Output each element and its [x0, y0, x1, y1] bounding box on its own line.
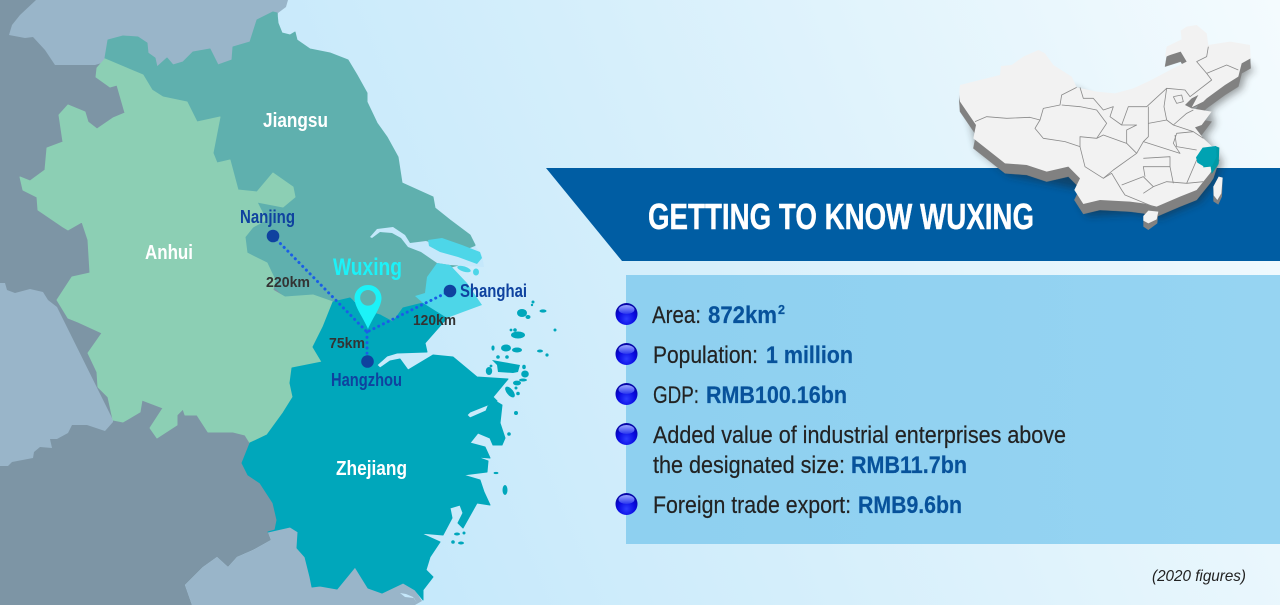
neighbouring region: north [9, 0, 288, 80]
locator map of China [959, 25, 1255, 230]
highlighted province: Zhejiang side wall [1203, 146, 1219, 174]
fact: added value: the designated size: [653, 452, 845, 479]
Shanghai [415, 263, 482, 318]
map extrusion [959, 35, 1251, 217]
fact: area: 2 [778, 302, 785, 317]
icon: Wuxing map pin [354, 285, 382, 329]
fact: foreign trade: RMB9.6bn [858, 492, 962, 519]
Chongming island [428, 238, 482, 264]
fact: area: Area: [652, 302, 701, 329]
small estuary islands [457, 264, 479, 276]
city dot: Shanghai [444, 285, 456, 297]
fact: added value: RMB11.7bn [851, 452, 967, 479]
map top surface [959, 25, 1251, 207]
Hainan [1143, 211, 1158, 230]
fact: added value [653, 422, 1066, 479]
city label: Shanghai: Shanghai [460, 281, 527, 301]
fact: foreign trade: Foreign trade export: [653, 492, 851, 519]
footnote: (2020 figures) [1152, 568, 1246, 585]
city label: Wuxing: Wuxing [333, 254, 402, 281]
regional map [0, 0, 556, 605]
neighbouring region: south [185, 527, 422, 605]
title banner [546, 168, 1280, 261]
bullet icons [616, 303, 638, 515]
city label: Hangzhou: Hangzhou [331, 370, 402, 390]
Taiwan [1213, 177, 1223, 205]
province label: Zhejiang: Zhejiang [336, 458, 407, 480]
map drop shadow [964, 54, 1255, 219]
distance label: 220km: 220km [266, 274, 310, 291]
neighbouring region: southwest [0, 283, 113, 466]
inlet: southern river mouth [400, 593, 417, 603]
fact: area [652, 302, 785, 329]
city dot: Nanjing [267, 230, 279, 242]
province: Jiangsu [105, 12, 475, 322]
distance label: 120km: 120km [413, 312, 456, 329]
Yangtze river mouth [370, 227, 484, 267]
title: GETTING TO KNOW WUXING [648, 196, 1034, 237]
fact: population: 1 million [766, 342, 853, 369]
panel background [626, 275, 1280, 544]
province: Anhui [20, 59, 333, 443]
facts panel [616, 275, 1280, 544]
province label: Anhui: Anhui [145, 242, 193, 264]
city dot: Hangzhou [361, 355, 374, 368]
province: Zhejiang [242, 298, 508, 600]
province borders [975, 47, 1238, 207]
banner shape [546, 168, 1280, 261]
distance label: 75km: 75km [329, 335, 365, 352]
city label: Nanjing: Nanjing [240, 207, 295, 227]
fact: population: Population: [653, 342, 758, 369]
fact: GDP: GDP: [653, 382, 699, 409]
province label: Jiangsu: Jiangsu [263, 110, 328, 132]
fact: GDP: RMB100.16bn [706, 382, 847, 409]
fact: population [653, 342, 853, 369]
highlighted province: Zhejiang [1196, 146, 1217, 167]
neighbouring region: dark west and south [0, 0, 300, 605]
offshore islands [451, 300, 556, 544]
fact: area: 872km [708, 302, 777, 329]
route: dotted distance lines [273, 236, 450, 361]
fact: added value: Added value of industrial enterprises above [653, 422, 1066, 449]
fact: GDP [653, 382, 847, 409]
